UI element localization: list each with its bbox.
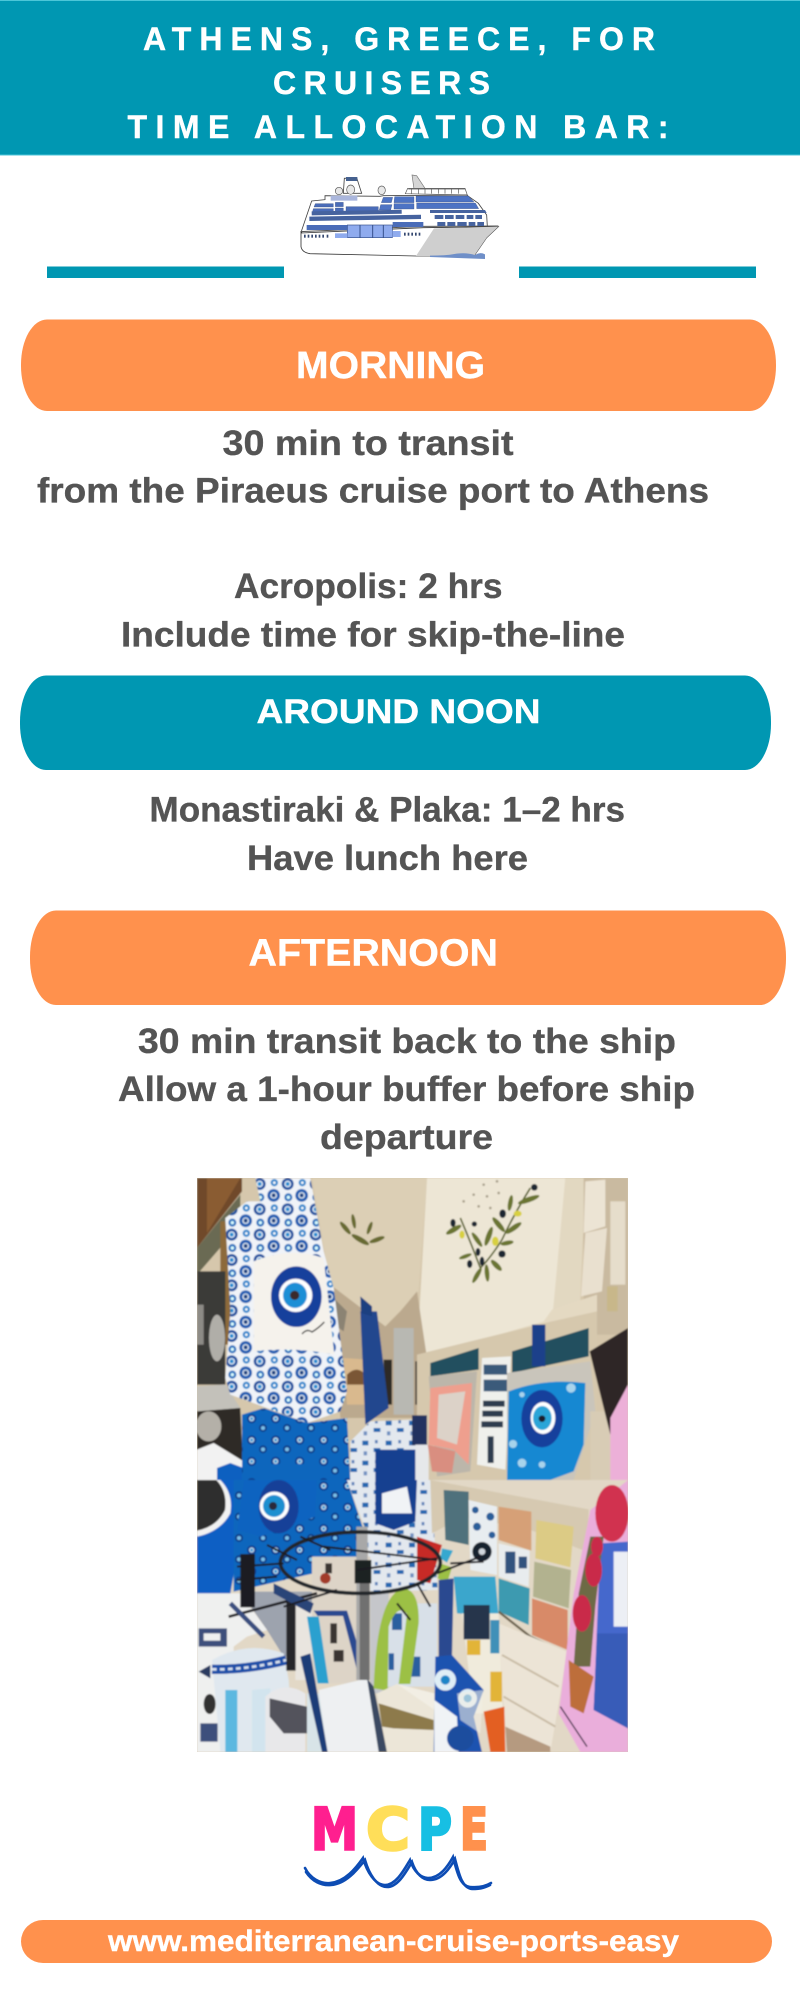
divider bar right xyxy=(519,266,756,278)
title: ATHENS, GREECE, FOR xyxy=(143,21,655,57)
title: CRUISERS xyxy=(273,65,490,101)
logo letters: E xyxy=(460,1796,488,1864)
panel: morning heading xyxy=(21,320,776,411)
panel: afternoon heading xyxy=(30,910,786,1005)
logo: MCPE with waves xyxy=(305,1796,491,1889)
text block: afternoon schedule: Allow a 1-hour buffer before ship xyxy=(118,1070,695,1109)
text block: morning schedule xyxy=(37,424,709,655)
title: TIME ALLOCATION BAR: xyxy=(128,109,668,145)
icon: waves xyxy=(305,1857,491,1889)
text block: afternoon schedule: 30 min transit back to the ship xyxy=(138,1022,676,1061)
divider bar left xyxy=(47,266,284,278)
text block: morning schedule: Include time for skip-the-line xyxy=(121,616,625,655)
text block: afternoon schedule: departure xyxy=(320,1118,493,1157)
panel: afternoon heading: AFTERNOON xyxy=(248,933,498,975)
logo letters: P xyxy=(418,1796,452,1864)
footer website pill xyxy=(21,1920,772,1963)
text block: morning schedule: Acropolis: 2 hrs xyxy=(234,567,502,606)
panel: morning heading: MORNING xyxy=(296,345,485,387)
logo letters: M xyxy=(311,1796,358,1864)
logo letters xyxy=(311,1796,488,1864)
logo letters: C xyxy=(366,1796,410,1864)
text block: noon schedule xyxy=(150,791,625,878)
panel: around noon heading: AROUND NOON xyxy=(256,693,540,731)
panel: around noon heading xyxy=(20,676,771,770)
photo: Greek souvenir shop with evil-eye aprons xyxy=(197,1178,628,1752)
text block: afternoon schedule xyxy=(118,1022,695,1157)
text block: morning schedule: from the Piraeus cruise port to Athens xyxy=(37,472,709,511)
text block: noon schedule: Monastiraki & Plaka: 1–2 hrs xyxy=(150,791,625,830)
text block: morning schedule: 30 min to transit xyxy=(222,424,514,463)
text block: noon schedule: Have lunch here xyxy=(247,839,528,878)
icon: cruise ship xyxy=(300,174,500,259)
header banner xyxy=(0,0,800,156)
footer website pill: www.mediterranean-cruise-ports-easy xyxy=(107,1925,679,1958)
title xyxy=(128,21,668,145)
